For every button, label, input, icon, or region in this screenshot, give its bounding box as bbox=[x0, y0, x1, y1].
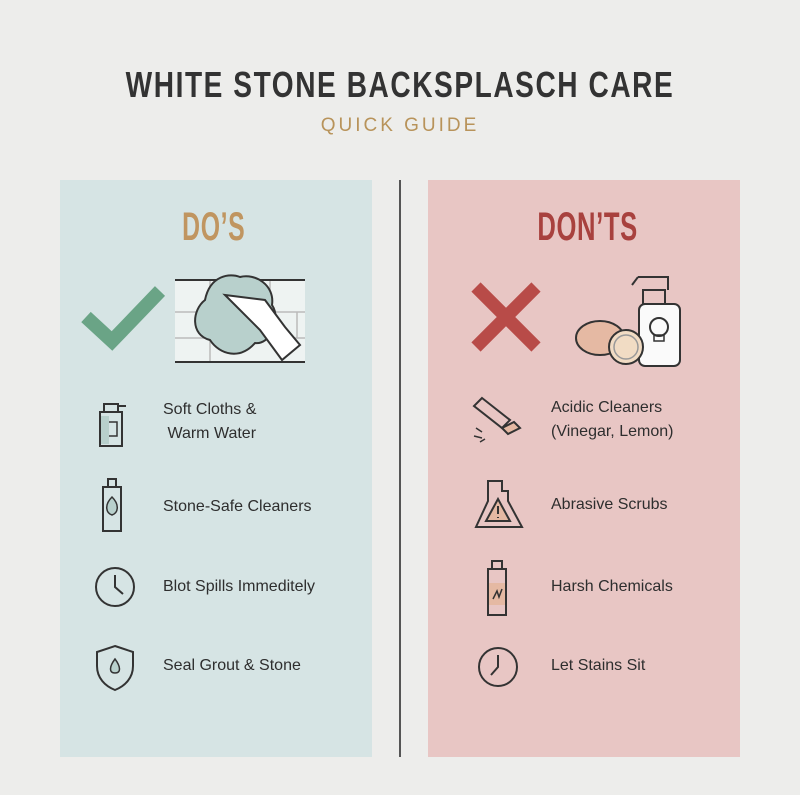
heading: don'ts: DON’TS bbox=[537, 205, 638, 249]
item: stone-safe cleaners: Stone-Safe Cleaners bbox=[163, 498, 312, 515]
item: seal grout: Seal Grout & Stone bbox=[163, 657, 301, 674]
item: acidic cleaners: (Vinegar, Lemon) bbox=[551, 423, 673, 440]
subtitle: QUICK GUIDE bbox=[321, 115, 479, 136]
item: stone-safe cleaners bbox=[102, 478, 312, 532]
icon: checkmark and wiping hand bbox=[81, 274, 305, 363]
item: acidic cleaners: Acidic Cleaners bbox=[551, 399, 662, 416]
item: let stains sit: Let Stains Sit bbox=[551, 657, 645, 674]
item: abrasive scrubs bbox=[474, 480, 668, 528]
item: seal grout bbox=[96, 645, 301, 692]
item: let stains sit bbox=[478, 647, 646, 687]
divider bbox=[399, 180, 401, 757]
icon: cross, lemon, poison bottle bbox=[472, 276, 681, 367]
heading: do's: DO’S bbox=[182, 205, 245, 249]
item: soft cloths: Soft Cloths & bbox=[163, 401, 256, 418]
panel: don'ts bbox=[428, 180, 740, 757]
item: acidic cleaners bbox=[472, 396, 673, 443]
item: blot spills bbox=[95, 567, 315, 607]
title: WHITE STONE BACKSPLASCH CARE bbox=[126, 64, 674, 105]
item: abrasive scrubs: Abrasive Scrubs bbox=[551, 496, 668, 513]
item: harsh chemicals bbox=[487, 560, 673, 616]
item: soft cloths bbox=[99, 401, 256, 447]
panel: do's bbox=[60, 180, 372, 757]
item: blot spills: Blot Spills Immeditely bbox=[163, 578, 315, 595]
item: soft cloths: Warm Water bbox=[167, 425, 256, 442]
item: harsh chemicals: Harsh Chemicals bbox=[551, 578, 673, 595]
